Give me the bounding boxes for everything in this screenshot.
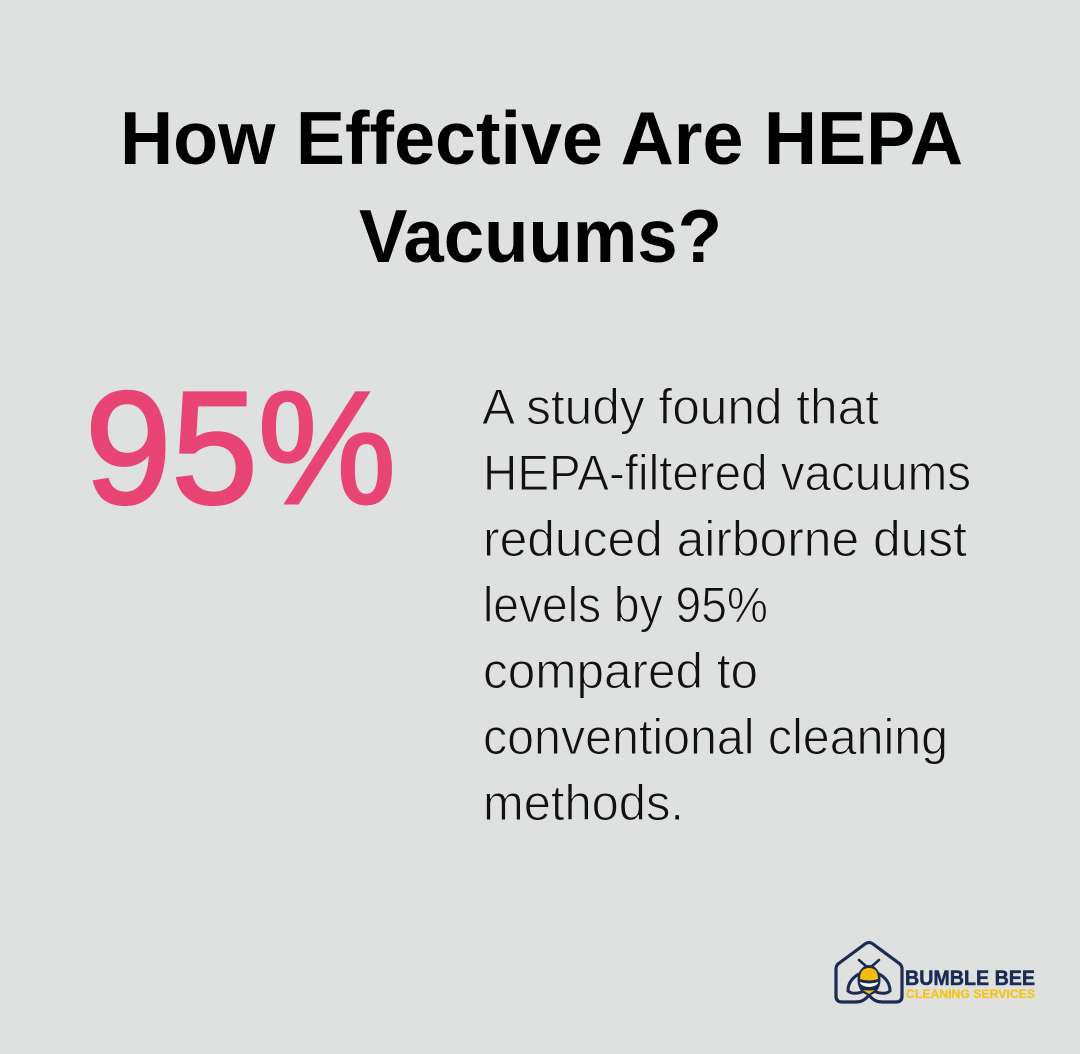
- title: Vacuums?: [359, 194, 722, 278]
- description text block: methods.: [483, 775, 684, 831]
- description text block: reduced airborne dust: [483, 511, 967, 567]
- logo: Bumble Bee Cleaning Services: [836, 942, 1035, 1002]
- logo wordmark: CLEANING SERVICES: [906, 987, 1035, 1001]
- description text block: compared to: [483, 643, 758, 699]
- big statistic: 95%: 95%: [85, 358, 396, 537]
- title: [120, 96, 963, 278]
- description text block: HEPA-filtered vacuums: [483, 445, 971, 501]
- description text block: A study found that: [482, 379, 879, 435]
- description text block: conventional cleaning: [483, 709, 948, 765]
- description text block: [482, 379, 971, 831]
- logo wordmark: [905, 967, 1035, 1001]
- icon: house with bee: [836, 942, 902, 1002]
- description text block: levels by 95%: [483, 577, 768, 633]
- logo wordmark: BUMBLE BEE: [905, 967, 1035, 990]
- title: How Effective Are HEPA: [120, 96, 963, 180]
